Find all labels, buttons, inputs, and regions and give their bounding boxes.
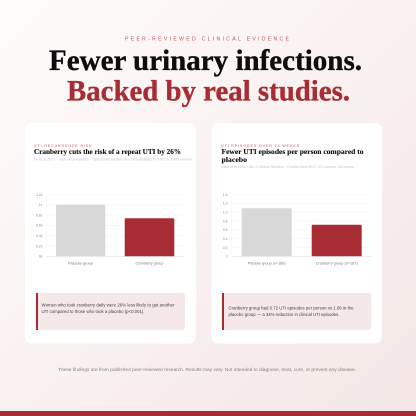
citation: Maki et al 2016 · Am J Clinical Nutrition · Double-blind RCT, 373 women, 24 weeks (222, 165, 354, 169)
panel label: UTI EPISODES OVER 24 WEEKS (221, 144, 300, 148)
panel label: UTI RECURRENCE RISK (34, 144, 92, 148)
bar chart: 1.2 (223, 202, 228, 206)
panel: UTI episodes over 24 weeks (212, 123, 382, 344)
bar: placebo (56, 205, 105, 256)
bar chart: 0.6 (223, 228, 228, 232)
panel heading: Cranberry cuts the risk of a repeat UTI by 26% (34, 147, 181, 156)
title line 1: Fewer urinary infections. (49, 44, 362, 77)
callout: placebo group — a 34% reduction in clinical UTI episodes. (228, 312, 340, 317)
bar chart: 0x (39, 255, 43, 259)
panel heading: placebo (222, 155, 247, 164)
bar chart: 0.8 (223, 219, 228, 223)
callout: UTI compared to those who took a placebo (p<0.001). (42, 309, 144, 314)
bar: cranberry (312, 225, 362, 256)
bar chart: 1.0 (223, 210, 228, 214)
citation: Fu et al 2017 · Journal of Nutrition · Systematic review and meta-analysis of 7 RCTs 1,498 women (34, 158, 192, 162)
bar chart: 0.8x (36, 213, 43, 217)
bar chart: 1x (39, 203, 43, 207)
bar: cranberry (125, 218, 174, 256)
bar chart (223, 193, 372, 266)
bar chart: 1.4 (223, 193, 228, 197)
panel heading (222, 147, 364, 164)
title line 2: Backed by real studies. (67, 74, 350, 108)
bar chart: 0 (226, 255, 228, 259)
bottom bar (0, 411, 416, 416)
callout: Women who took cranberry daily were 26% less likely to get another (42, 302, 175, 308)
disclaimer: These findings are from published peer-reviewed research. Results may vary. Not intended to diagnose, treat, cure, or prevent any disease. (58, 367, 356, 372)
bar chart: 1.2x (36, 193, 43, 197)
panel heading: Fewer UTI episodes per person compared to (222, 147, 364, 156)
bar chart (36, 193, 184, 266)
callout (222, 293, 372, 330)
bar chart: 0.4x (36, 234, 43, 238)
panel: UTI recurrence risk (25, 123, 196, 344)
bar: placebo (242, 208, 292, 256)
bar chart: 0.2x (36, 244, 43, 248)
eyebrow: PEER-REVIEWED CLINICAL EVIDENCE (125, 36, 290, 42)
callout (36, 293, 185, 330)
bar chart: 0.4 (223, 237, 228, 241)
bar chart: Cranberry group (n=187) (316, 260, 358, 266)
bar chart: 0.2 (223, 246, 228, 250)
bar chart: 0.6x (36, 224, 43, 228)
bar chart: Placebo group (n=186) (248, 260, 286, 266)
callout: Cranberry group had 0.72 UTI episodes per person vs 1.09 in the (228, 306, 354, 310)
bar chart: Placebo group (68, 260, 93, 266)
bar chart: Cranberry group (136, 260, 164, 266)
